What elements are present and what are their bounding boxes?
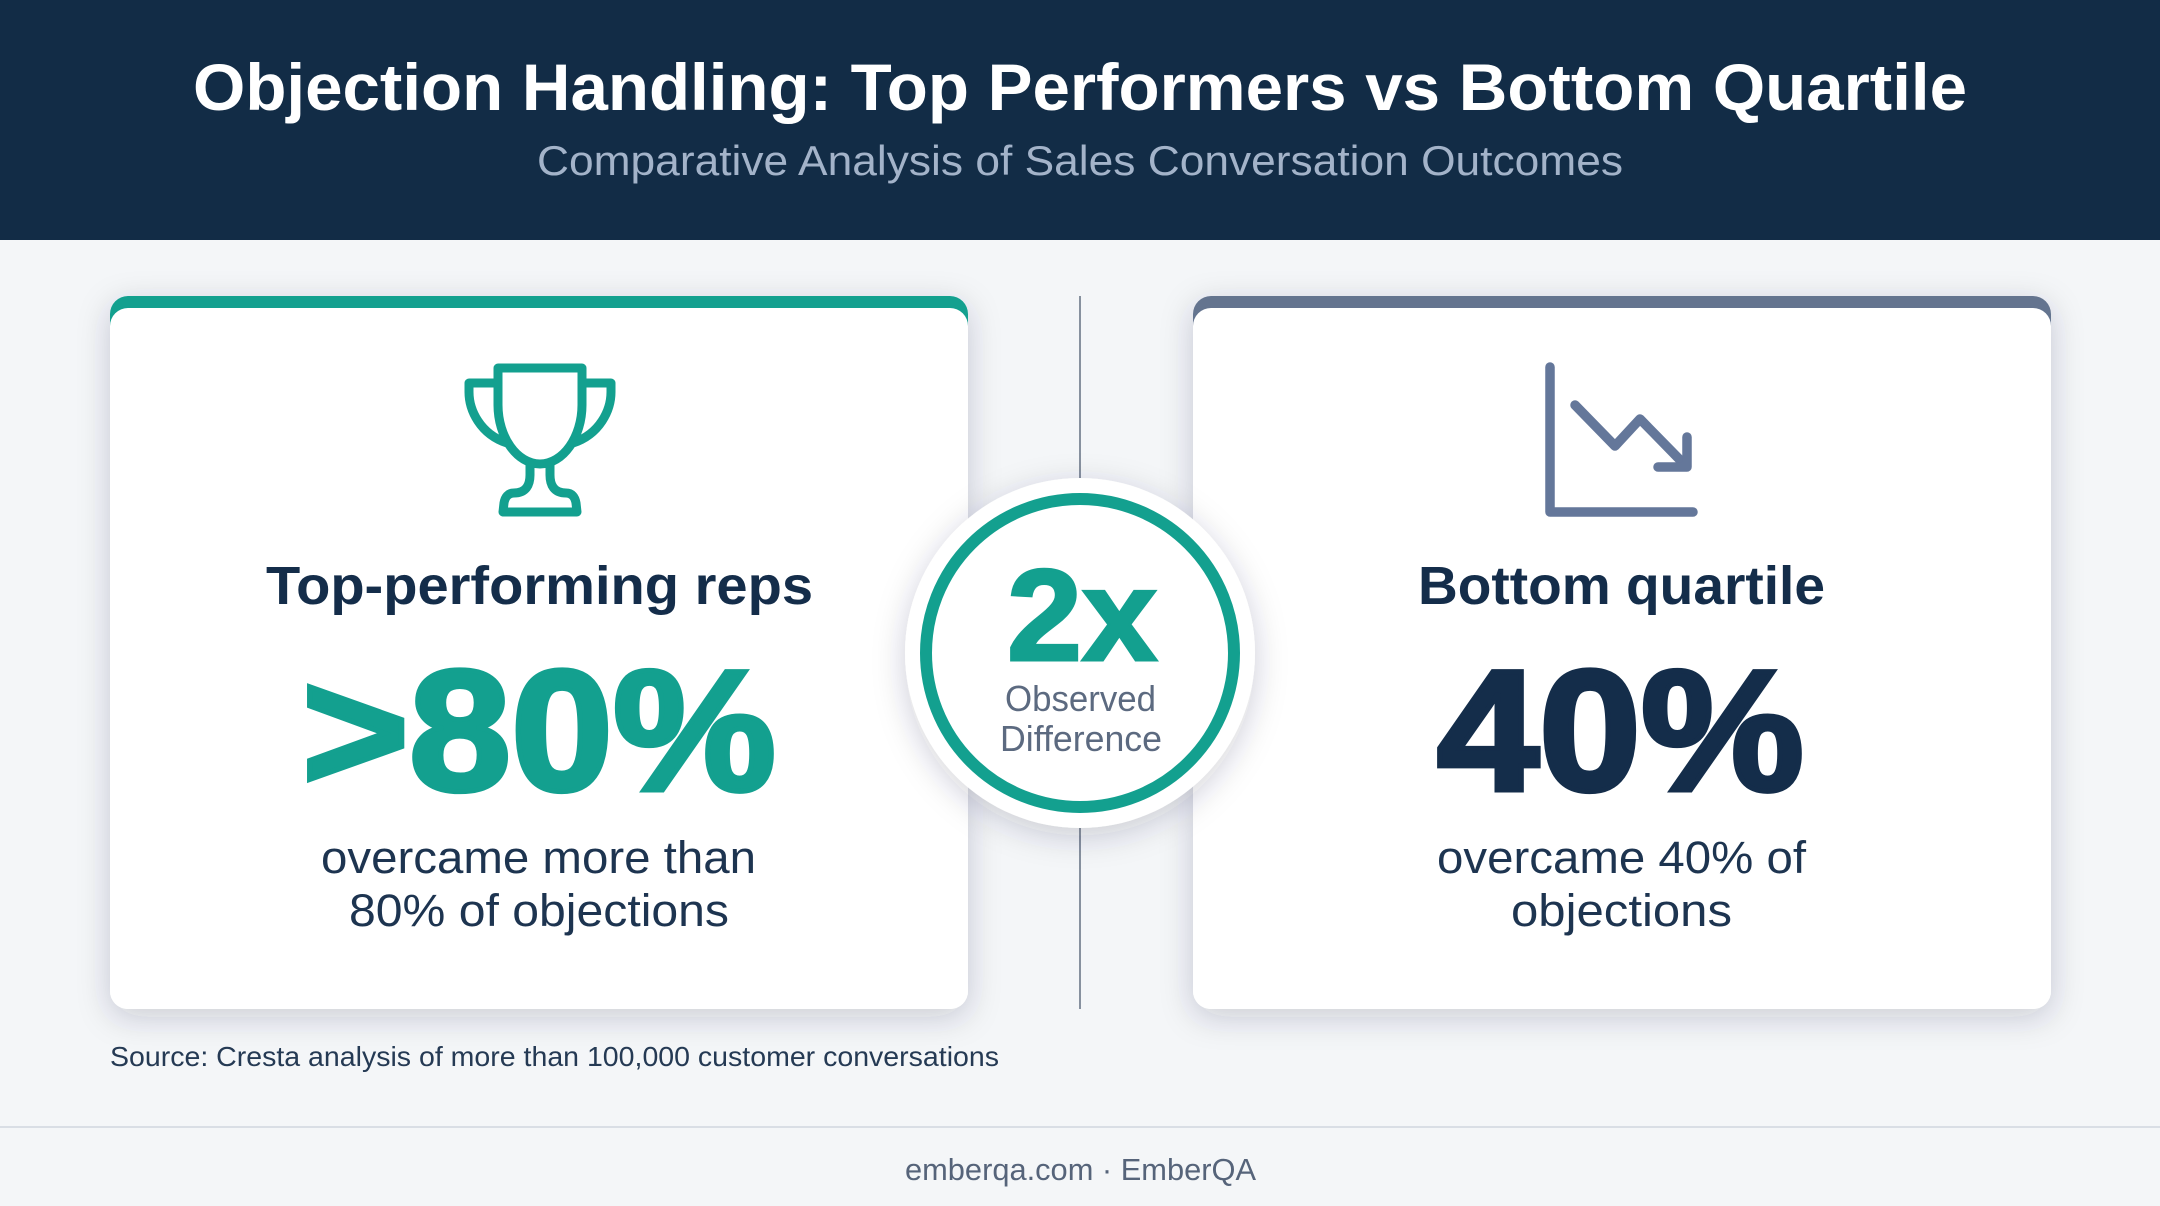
heading: bottom quartile: Bottom quartile <box>1418 556 1825 616</box>
label: observed difference: Difference <box>1000 718 1162 759</box>
description: top performers <box>321 832 756 936</box>
header banner <box>0 0 2160 240</box>
subtitle: Comparative Analysis of Sales Conversation Outcomes <box>537 137 1623 184</box>
source note: Source: Cresta analysis of more than 100,000 customer conversations <box>110 1041 999 1072</box>
description: top performers: 80% of objections <box>349 885 729 936</box>
label: observed difference <box>1000 678 1162 759</box>
heading: top-performing reps: Top-performing reps <box>266 556 813 616</box>
description: bottom quartile: objections <box>1511 885 1732 936</box>
vertical divider <box>1079 296 1081 1009</box>
title: Objection Handling: Top Performers vs Bottom Quartile <box>193 50 1967 124</box>
description: bottom quartile: overcame 40% of <box>1437 832 1807 883</box>
stat: 2x: 2x <box>1007 542 1157 688</box>
stat: 40%: 40% <box>1437 635 1804 827</box>
description: top performers: overcame more than <box>321 832 756 883</box>
description: bottom quartile <box>1437 832 1807 936</box>
callout: 2x observed difference <box>905 478 1255 828</box>
label: observed difference: Observed <box>1005 678 1156 719</box>
stat: greater than 80%: >80% <box>302 635 776 827</box>
icon: trophy <box>469 368 611 512</box>
panel: bottom quartile <box>1193 296 2051 1009</box>
footer: emberqa.com · EmberQA <box>905 1152 1256 1187</box>
icon: declining chart <box>1550 367 1693 512</box>
panel: top-performing reps <box>110 296 968 1009</box>
